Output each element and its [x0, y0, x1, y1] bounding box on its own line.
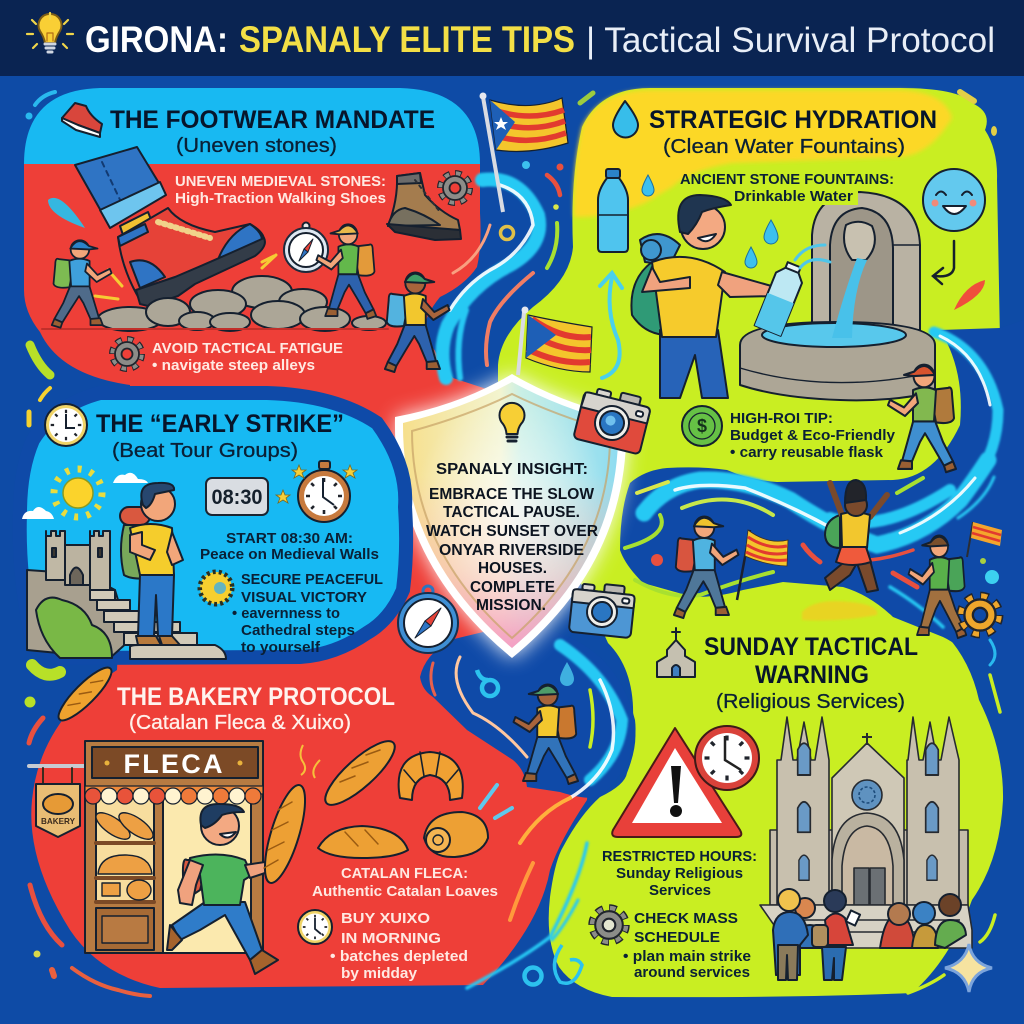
flag: top Catalan flag — [480, 92, 568, 212]
subheading: (Clean Water Fountains) — [663, 136, 905, 158]
clouds — [22, 473, 148, 519]
icon: clock small — [298, 910, 332, 944]
crowd in front of the cathedral — [773, 889, 966, 980]
cyan panel shape — [20, 393, 406, 658]
arrow: curled black — [933, 241, 954, 284]
sparkle star — [945, 944, 992, 992]
hiker: green shirt with compass — [316, 224, 376, 319]
insight body — [426, 486, 598, 614]
text: buy xuixo in morning — [330, 910, 468, 982]
text: peace on medieval walls: Peace on Medieval Walls — [200, 546, 379, 563]
digital time display — [206, 478, 268, 515]
text: avoid tactical fatigue: AVOID TACTICAL FATIGUE — [152, 340, 343, 357]
blue swirl right of shield — [620, 320, 1024, 660]
title: GIRONA: — [85, 19, 228, 60]
text: secure peaceful visual victory: to yourself — [241, 639, 321, 656]
text: check mass schedule: CHECK MASS — [634, 910, 738, 927]
text: catalan fleca: CATALAN FLECA: — [341, 865, 468, 882]
icon: insight bulb — [500, 403, 524, 441]
text: check mass schedule: SCHEDULE — [634, 929, 720, 946]
icon: stopwatch with stars — [276, 461, 357, 522]
subheading: (Religious Services) — [716, 691, 905, 713]
shield inner line — [412, 394, 610, 638]
text: check mass schedule: around services — [634, 964, 750, 981]
insight body: WATCH SUNSET OVER — [426, 523, 598, 540]
subheading: (Catalan Fleca & Xuixo) — [129, 712, 351, 734]
icon: red shoe — [62, 103, 102, 137]
yellow wash of hydration panel — [574, 90, 952, 217]
hiker filling a bottle — [631, 195, 807, 398]
steam and sparks — [300, 745, 320, 778]
cathedral illustration — [760, 717, 972, 948]
insight body: TACTICAL PAUSE. — [443, 504, 580, 521]
icon: light bulb — [27, 13, 73, 52]
shield outer edge — [395, 374, 626, 658]
header bar — [0, 0, 1024, 76]
text: buy xuixo in morning: by midday — [341, 965, 418, 982]
hiker in blue bubble — [514, 684, 578, 784]
flag: centre Catalan flag — [518, 306, 592, 375]
panel: the footwear mandate — [42, 103, 469, 374]
insight body: MISSION. — [476, 597, 546, 614]
bakery shop front: FLECA — [124, 749, 224, 779]
insight heading: SPANALY INSIGHT: — [436, 461, 588, 478]
red region: footwear panel body and bakery panel — [24, 164, 590, 988]
centre shield — [395, 374, 626, 658]
swirl hikers — [674, 480, 966, 638]
subheading: (Beat Tour Groups) — [112, 440, 298, 462]
icon: chapel — [657, 628, 695, 677]
heading: STRATEGIC HYDRATION — [649, 106, 937, 134]
text: carry reusable flask: • carry reusable flask — [730, 444, 884, 461]
panel: the early strike — [20, 393, 406, 659]
icon: compass — [284, 222, 328, 272]
heading: THE “EARLY STRIKE” — [96, 410, 344, 438]
heading line two: WARNING — [755, 661, 869, 689]
text: secure peaceful visual victory: VISUAL VICTORY — [241, 589, 367, 606]
shield rainbow wash — [403, 382, 618, 648]
fountain — [740, 192, 935, 400]
heading: THE BAKERY PROTOCOL — [117, 683, 395, 711]
text: check mass schedule: • plan main strike — [623, 948, 751, 965]
panel: the bakery protocol — [29, 661, 512, 982]
hiker: yellow shirt green cap — [385, 272, 450, 372]
water splash — [795, 245, 830, 268]
blue bubble below shield — [420, 625, 636, 798]
river streams — [431, 179, 998, 988]
hanging bakery sign: BAKERY — [41, 816, 75, 826]
icon: orange gear — [962, 597, 998, 633]
text: services: Services — [649, 882, 711, 899]
icon: gear — [441, 174, 469, 202]
insight body: COMPLETE — [470, 579, 555, 596]
icon: flying baguette — [52, 661, 118, 727]
insight body: ONYAR RIVERSIDE — [439, 542, 584, 559]
central glow — [397, 374, 626, 658]
water drops — [480, 785, 512, 818]
panel: strategic hydration — [598, 101, 985, 472]
text: secure peaceful visual victory — [232, 571, 383, 656]
title: | Tactical Survival Protocol — [586, 21, 995, 60]
small Catalan flags — [737, 522, 1002, 600]
castle walls — [27, 531, 226, 659]
cyan splash — [48, 198, 85, 228]
icon: red camera — [573, 384, 653, 455]
icon: cyan swirl ring — [477, 670, 498, 696]
yellow patch above Sunday panel — [802, 601, 877, 620]
title: SPANALY ELITE TIPS — [239, 19, 575, 60]
text: budget and eco friendly: Budget & Eco-Friendly — [730, 427, 896, 444]
hiker: blue cap — [52, 240, 112, 328]
text: check mass schedule — [623, 910, 751, 981]
icon: smiling water face — [923, 169, 985, 231]
text: high roi tip: HIGH-ROI TIP: — [730, 410, 833, 427]
text: secure peaceful visual victory: • eavernness to — [232, 605, 340, 622]
hiker: yellow cap — [674, 517, 738, 618]
hanging bakery sign — [29, 766, 85, 837]
lime regions: hydration and Sunday panels — [498, 88, 1003, 997]
icon: hiking boot — [387, 173, 461, 240]
water drop in bubble — [560, 662, 574, 686]
text: restricted hours: RESTRICTED HOURS: — [602, 848, 757, 865]
text: ancient stone fountains: ANCIENT STONE FOUNTAINS: — [680, 171, 894, 188]
icon: sun — [54, 469, 102, 517]
shield face — [403, 382, 618, 648]
text: start time: START 08:30 AM: — [226, 530, 353, 547]
insight body: HOUSES. — [478, 560, 547, 577]
arrow: cyan rising — [600, 273, 622, 378]
icon: gear with clock — [593, 909, 625, 941]
text: buy xuixo in morning: BUY XUIXO — [341, 910, 430, 927]
text: navigate steep alleys: • navigate steep alleys — [152, 357, 315, 374]
water stream from the fountain — [832, 258, 867, 338]
text: sunday religious: Sunday Religious — [616, 865, 743, 882]
icon: clock — [45, 404, 87, 446]
heading: THE FOOTWEAR MANDATE — [110, 106, 435, 134]
text: buy xuixo in morning: • batches depleted — [330, 948, 468, 965]
decorative drops — [642, 175, 778, 268]
text: authentic catalan loaves: Authentic Catalan Loaves — [312, 883, 498, 900]
subheading: (Uneven stones) — [176, 135, 337, 157]
hiker: green shirt with flag — [908, 536, 966, 638]
text: high traction shoes: High-Traction Walking Shoes — [175, 190, 386, 207]
text: secure peaceful visual victory: Cathedral steps — [241, 622, 355, 639]
digital time display: 08:30 — [212, 486, 262, 509]
insight body: EMBRACE THE SLOW — [429, 486, 595, 503]
icon: warning triangle with clock — [612, 726, 759, 837]
cyan loops at bottom — [524, 945, 582, 984]
stones — [42, 276, 388, 331]
icon: dollar coin: $ — [697, 416, 707, 436]
icon: compass centre — [398, 586, 458, 653]
panel: sunday tactical warning — [593, 628, 992, 992]
impact sparks — [95, 255, 276, 299]
icon: water drop — [613, 101, 638, 138]
icon: plastic bottle — [598, 169, 628, 252]
icon: gear small — [113, 340, 141, 368]
icon: dollar coin — [682, 406, 722, 446]
man running with baguette — [167, 781, 313, 974]
bread assortment — [317, 732, 488, 858]
text: secure peaceful visual victory: SECURE PEACEFUL — [241, 571, 383, 588]
icon: blue camera — [569, 581, 636, 638]
text: buy xuixo in morning: IN MORNING — [341, 930, 441, 947]
big boot on stones — [75, 147, 265, 306]
bakery shop front — [85, 741, 263, 953]
hiker: red haired girl — [888, 365, 956, 472]
text: uneven medieval stones: UNEVEN MEDIEVAL STONES: — [175, 173, 386, 190]
cyan top of footwear panel — [24, 88, 480, 164]
hiker: arms raised — [825, 480, 887, 592]
hiker standing on steps — [120, 483, 183, 645]
heading: SUNDAY TACTICAL — [704, 633, 918, 661]
icon: gold medal — [200, 572, 232, 604]
text: drinkable water: Drinkable Water — [734, 188, 853, 205]
